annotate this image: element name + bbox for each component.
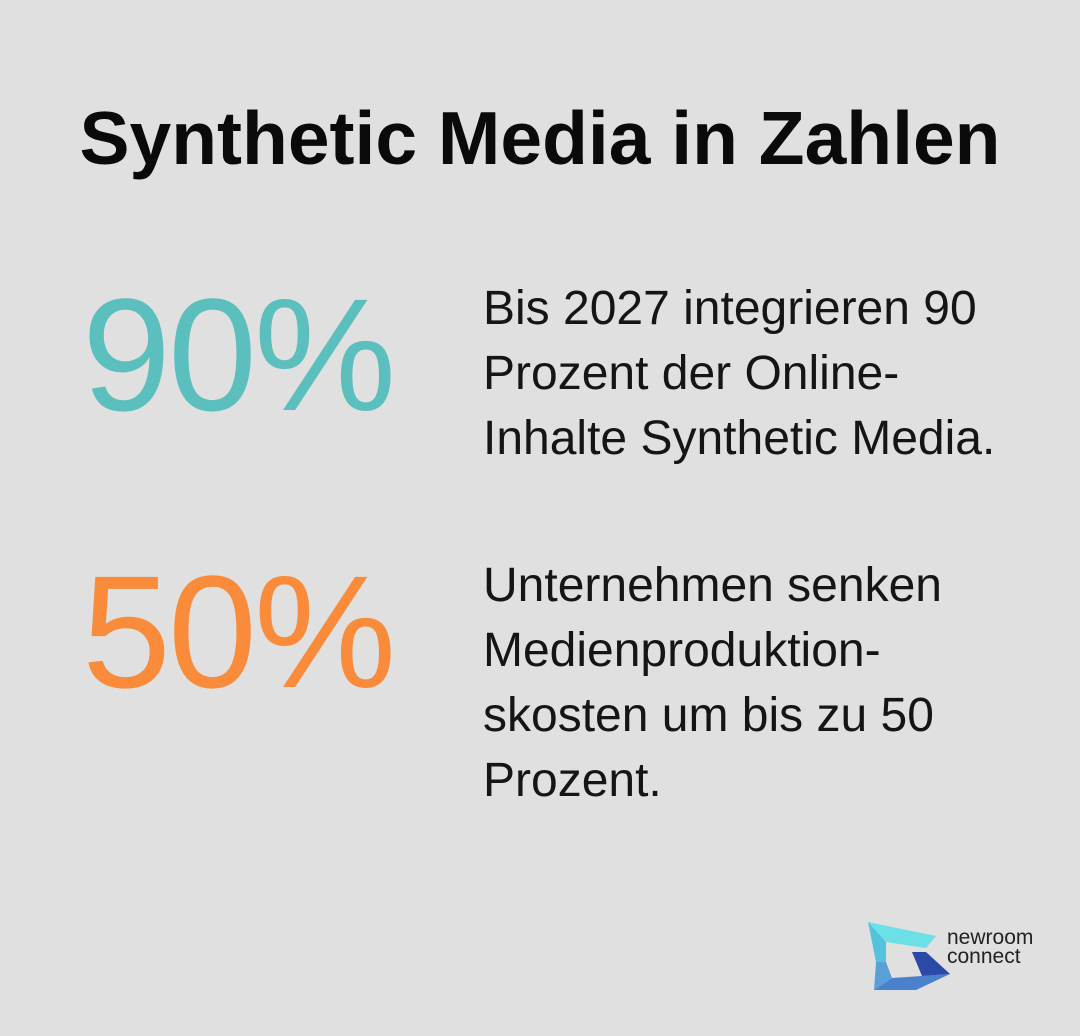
text: 90% description: Prozent der Online- bbox=[483, 347, 899, 400]
text: 50% description: skosten um bis zu 50 bbox=[483, 689, 934, 742]
logo bbox=[868, 922, 1033, 990]
text: 50% description bbox=[483, 559, 942, 807]
icon: logo mark bbox=[868, 922, 950, 990]
logo text bbox=[947, 926, 1033, 968]
logo text: connect bbox=[947, 945, 1021, 968]
text: 50% description: Unternehmen senken bbox=[483, 559, 942, 612]
logo text: newroom bbox=[947, 926, 1033, 949]
text: 90% description: Inhalte Synthetic Media. bbox=[483, 412, 995, 465]
text: 90% description bbox=[483, 282, 995, 465]
text: 50% description: Medienproduktion- bbox=[483, 624, 881, 677]
text: 90% description: Bis 2027 integrieren 90 bbox=[483, 282, 977, 335]
title: Synthetic Media in Zahlen bbox=[80, 96, 1000, 180]
stat: 90%: 90% bbox=[82, 265, 393, 444]
text: 50% description: Prozent. bbox=[483, 754, 662, 807]
stat: 50%: 50% bbox=[82, 542, 393, 721]
